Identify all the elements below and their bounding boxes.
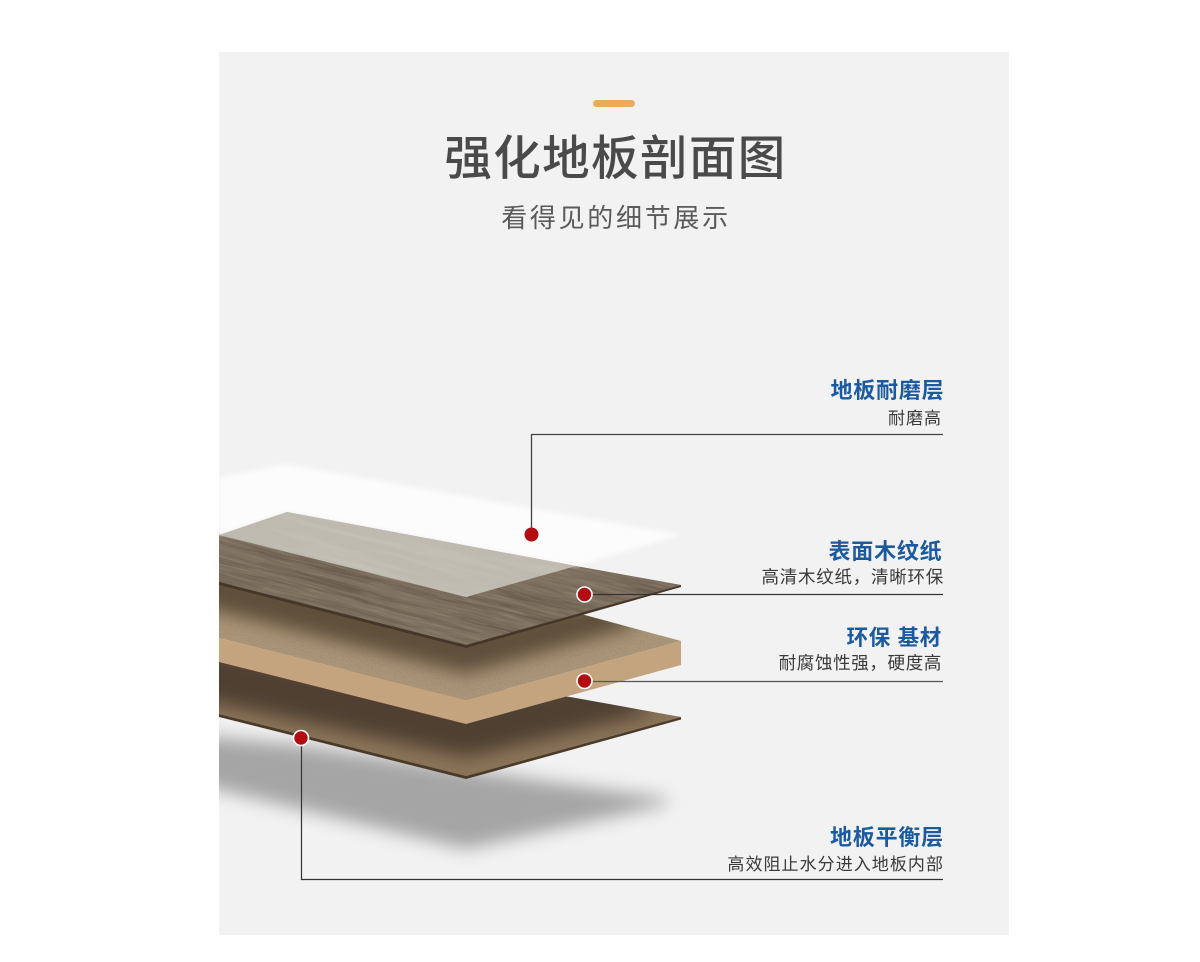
label note: eco substrate: 耐腐蚀性强，硬度高 [779,653,942,673]
callout: wear layer [524,378,944,542]
accent bar [593,100,635,107]
infographic canvas [219,52,1009,935]
marker: wear layer [524,528,538,542]
floor layers illustration [219,466,681,858]
layer: balance layer [219,662,681,779]
label heading: balance layer: 地板平衡层 [830,825,944,850]
layer: eco substrate [219,582,681,724]
leader line: wood grain paper [590,594,943,596]
label heading: eco substrate: 环保 基材 [847,626,942,650]
label note: wood grain paper: 高清木纹纸，清晰环保 [762,567,944,587]
callout: eco substrate [577,626,943,688]
label note: wear layer: 耐磨高 [888,409,942,428]
label note: balance layer: 高效阻止水分进入地板内部 [727,855,944,874]
marker: balance layer [294,730,308,746]
ground shadow [195,735,669,849]
panel: background [219,52,1009,935]
label heading: wood grain paper: 表面木纹纸 [828,539,942,564]
label heading: wear layer: 地板耐磨层 [830,378,944,403]
leader line: balance layer [302,744,943,880]
layer: wear film [219,464,680,566]
callout: balance layer [294,730,944,880]
layer: wood grain paper [219,512,681,648]
leader line: eco substrate [590,680,943,682]
subtitle: 看得见的细节展示 [501,203,731,233]
title: 强化地板剖面图 [444,133,787,186]
leader line: wear layer [532,434,943,530]
marker: wood grain paper [577,587,592,602]
marker: eco substrate [577,674,592,688]
wear film over wood [220,512,576,597]
callout: wood grain paper [577,539,944,602]
